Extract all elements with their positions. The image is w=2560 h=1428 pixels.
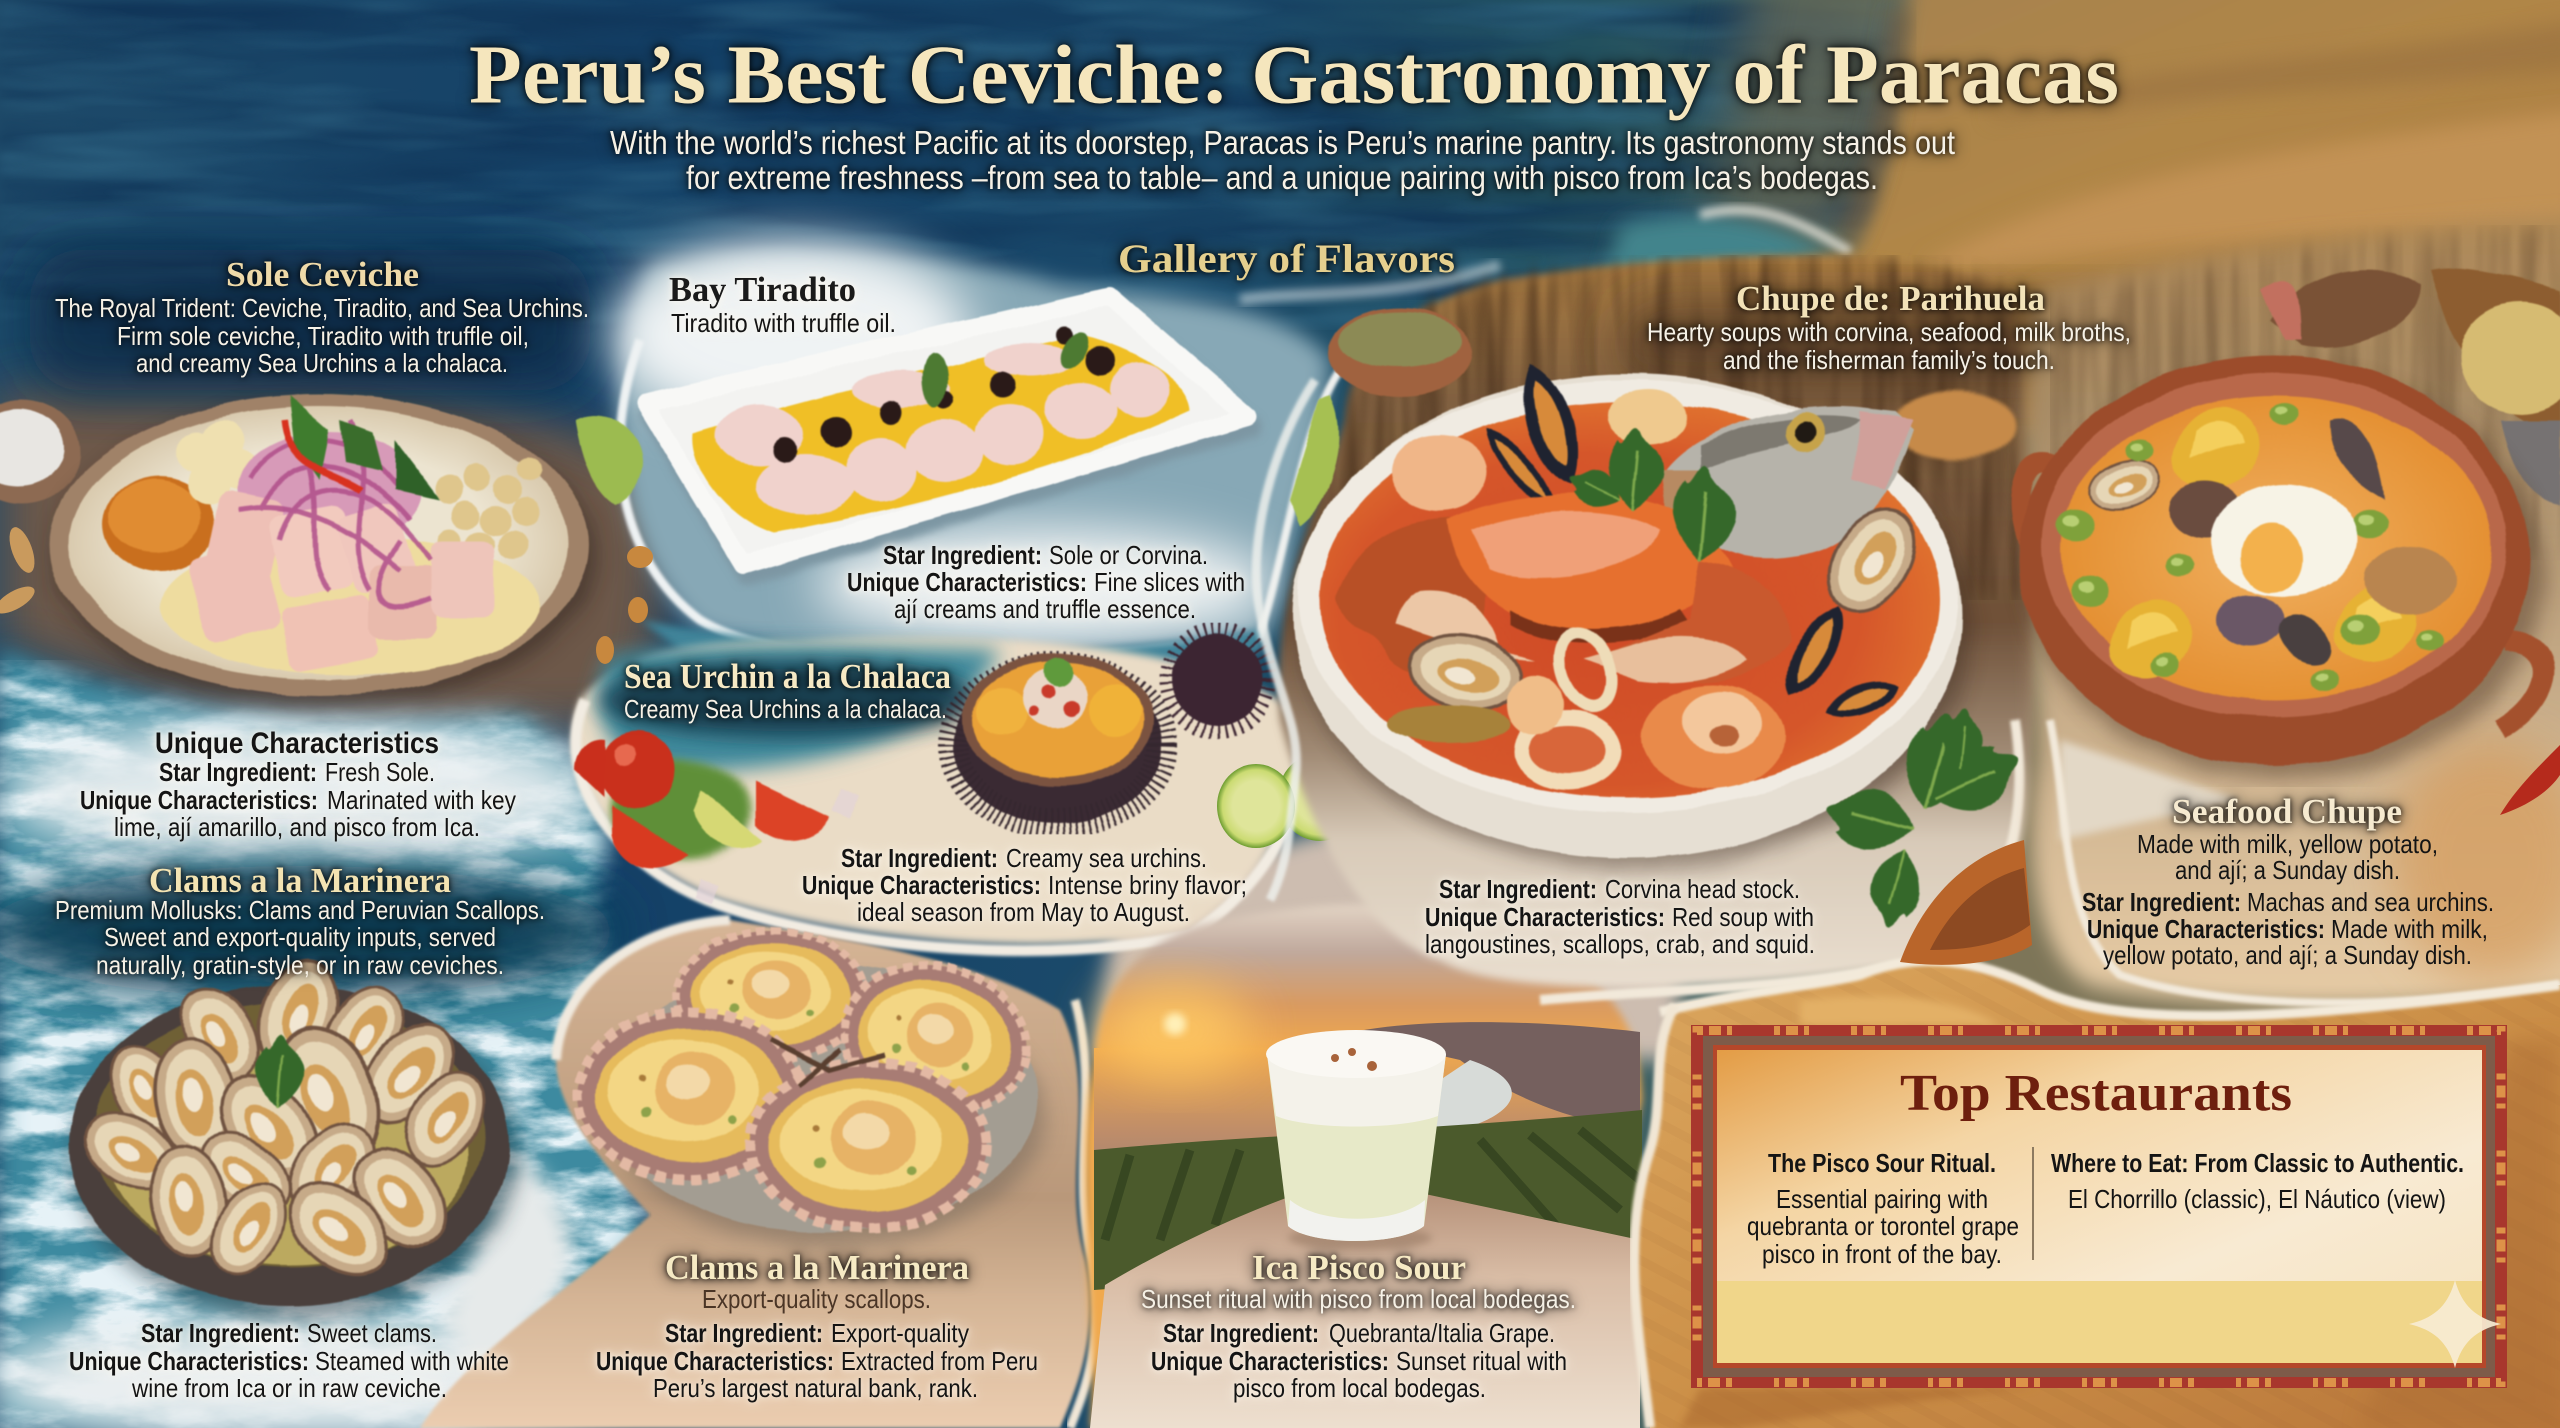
text: chupe details: yellow potato, and ají; a Sunday dish.	[2103, 940, 2472, 970]
title: Peru’s Best Ceviche: Gastronomy of Paracas	[469, 28, 2119, 122]
text: clams a la marinera intro: Sweet and export-quality inputs, served	[104, 922, 496, 952]
text: pisco sour ritual: Essential pairing with	[1776, 1184, 1988, 1214]
text: sea urchin details: Creamy sea urchins.	[1006, 843, 1207, 873]
text: pisco details: Unique Characteristics:	[1151, 1346, 1389, 1376]
text: chupe de parihuela: Chupe de: Parihuela	[1736, 279, 2045, 318]
text: seafood chupe: and ají; a Sunday dish.	[2175, 855, 2400, 885]
icon: pisco sour glass	[1266, 1030, 1446, 1250]
text: tiradito details: Fine slices with	[1094, 567, 1245, 597]
text: clams a la marinera intro: Premium Mollusks: Clams and Peruvian Scallops.	[55, 895, 545, 925]
text: clams details: Steamed with white	[315, 1346, 509, 1376]
text: pisco sour ritual: The Pisco Sour Ritual.	[1768, 1148, 1996, 1178]
text: pisco details: Quebranta/Italia Grape.	[1329, 1318, 1555, 1348]
icon: tiradito plate	[645, 296, 1253, 575]
icon: crab	[1336, 494, 1790, 683]
text: sea urchin details: Star Ingredient:	[841, 843, 998, 873]
icon: ceviche plate	[49, 394, 642, 708]
panel: tiradito	[610, 240, 1340, 676]
text: parihuela details: Star Ingredient:	[1439, 874, 1597, 904]
icon: parsley sprig	[1820, 709, 2031, 932]
card yellow band	[1717, 1281, 2482, 1363]
text: unique characteristics: Marinated with key	[327, 785, 516, 815]
text: unique characteristics: lime, ají amarillo, and pisco from Ica.	[114, 812, 480, 842]
text: pisco sour ritual: pisco in front of the bay.	[1762, 1239, 2002, 1269]
text: chupe details: Unique Characteristics:	[2087, 914, 2325, 944]
text: unique characteristics: Fresh Sole.	[325, 757, 435, 787]
panel: scallops	[420, 920, 1096, 1428]
text: sea urchin details: Unique Characteristics:	[802, 870, 1041, 900]
subtitle: for extreme freshness –from sea to table– and a unique pairing with pisco from Ica’s bodegas.	[686, 159, 1878, 196]
icon: clams and shrimp behind crab	[1391, 389, 1688, 511]
icon: peanuts scattered	[0, 524, 653, 664]
text: unique characteristics	[80, 727, 516, 842]
text: ica pisco sour	[1141, 1248, 1576, 1314]
text: ica pisco sour: Ica Pisco Sour	[1252, 1248, 1466, 1287]
text: where to eat	[2051, 1148, 2464, 1214]
text: sole ceviche: The Royal Trident: Ceviche, Tiradito, and Sea Urchins.	[55, 293, 589, 323]
heading: gallery of flavors: Gallery of Flavors	[1118, 236, 1455, 281]
text: bay tiradito: Bay Tiradito	[669, 270, 856, 309]
ocean behind clams	[0, 650, 650, 1428]
text: unique characteristics: Unique Characteristics	[155, 727, 439, 760]
panel: sole ceviche background	[0, 250, 663, 729]
text: where to eat: Where to Eat: From Classic to Authentic.	[2051, 1148, 2464, 1178]
text: clams details: wine from Ica or in raw ceviche.	[131, 1373, 447, 1403]
text: clams a la marinera intro: Clams a la Marinera	[149, 861, 451, 900]
text: bay tiradito: Tiradito with truffle oil.	[671, 308, 896, 338]
text: clams a la marinera intro	[55, 861, 545, 980]
icon: small terracotta bowl	[1900, 840, 2032, 965]
icon: chupe pot	[2019, 355, 2544, 780]
panel: sea urchin	[573, 637, 1299, 951]
text: clams details: Star Ingredient:	[141, 1318, 300, 1348]
text: tiradito details: Star Ingredient:	[883, 540, 1042, 570]
text: sole ceviche	[55, 255, 589, 378]
text: seafood chupe: Made with milk, yellow potato,	[2137, 829, 2438, 859]
text: pisco details	[1151, 1318, 1567, 1403]
text: pisco details: Star Ingredient:	[1163, 1318, 1319, 1348]
text: chupe details: Machas and sea urchins.	[2247, 887, 2494, 917]
panel: seafood chupe	[2027, 215, 2560, 1004]
text: tiradito details: Sole or Corvina.	[1049, 540, 1208, 570]
text: seafood chupe	[2137, 792, 2438, 885]
ocean wave texture	[0, 0, 1900, 330]
icon: salt bowl	[0, 400, 80, 504]
text: chupe de parihuela: Hearty soups with corvina, seafood, milk broths,	[1647, 317, 2131, 347]
divider	[2032, 1147, 2034, 1260]
text: pisco details: Sunset ritual with	[1396, 1346, 1567, 1376]
card frame	[1691, 1025, 2507, 1388]
icon: parsley on soup	[1563, 428, 1735, 560]
background: desert dunes and cliff	[1240, 0, 2560, 430]
text: chupe details: Made with milk,	[2331, 914, 2488, 944]
text: bay tiradito	[669, 270, 896, 338]
text: parihuela details: Red soup with	[1672, 902, 1814, 932]
text: clams a la marinera intro: naturally, gratin-style, or in raw ceviches.	[96, 950, 504, 980]
text: clams a la marinera scallops: Export-quality scallops.	[702, 1284, 931, 1314]
icon: side bowls and bread	[1290, 308, 2017, 525]
text: parihuela details	[1425, 874, 1815, 959]
text: sea urchin details: Intense briny flavor;	[1048, 870, 1247, 900]
text: parihuela details: langoustines, scallops, crab, and squid.	[1425, 929, 1815, 959]
text: sole ceviche: Sole Ceviche	[226, 255, 419, 294]
text: parihuela details: Corvina head stock.	[1605, 874, 1800, 904]
text: scallops details: Unique Characteristics:	[596, 1346, 834, 1376]
subtitle	[610, 124, 1955, 196]
text: scallops details: Peru’s largest natural bank, rank.	[653, 1373, 978, 1403]
icon: scallops plate	[578, 930, 1045, 1246]
background: light gap between panels	[1090, 830, 1680, 1060]
panel: parihuela	[1256, 255, 2160, 1000]
subtitle: With the world’s richest Pacific at its doorstep, Paracas is Peru’s marine pantry. Its gastronomy stands out	[610, 124, 1955, 161]
text: chupe details	[2082, 887, 2494, 970]
text: sea urchin details: ideal season from May to August.	[857, 897, 1190, 927]
panel: pisco sour scene	[1084, 904, 1642, 1428]
card heading: Top Restaurants	[1900, 1065, 2292, 1122]
text: chupe de parihuela	[1647, 279, 2131, 375]
icon: red chili	[2500, 745, 2560, 815]
icon: lime slices	[1217, 753, 1362, 848]
text: clams details: Sweet clams.	[307, 1318, 437, 1348]
text: clams a la marinera scallops	[665, 1248, 969, 1314]
text: sea urchin details	[802, 843, 1247, 927]
text: pisco details: pisco from local bodegas.	[1233, 1373, 1486, 1403]
text: sea urchin a la chalaca: Creamy Sea Urchins a la chalaca.	[624, 694, 947, 724]
text: tiradito details: Unique Characteristics:	[847, 567, 1087, 597]
text: scallops details	[596, 1318, 1038, 1403]
text: scallops details: Export-quality	[831, 1318, 969, 1348]
text: unique characteristics: Unique Characteristics:	[80, 785, 318, 815]
text: parihuela details: Unique Characteristics:	[1425, 902, 1665, 932]
panel: top restaurants card	[1691, 1025, 2507, 1388]
icon: clams bowl	[68, 948, 517, 1320]
text: seafood chupe: Seafood Chupe	[2172, 792, 2402, 831]
icon: sea urchins	[953, 634, 1264, 823]
text: tiradito details: ají creams and truffle essence.	[894, 594, 1196, 624]
icon: tomatoes and lime	[574, 732, 858, 904]
text: unique characteristics: Star Ingredient:	[159, 757, 317, 787]
panel: restaurants sand	[1634, 961, 2560, 1428]
foam texture	[0, 660, 650, 1428]
text: clams details: Unique Characteristics:	[69, 1346, 309, 1376]
text: scallops details: Extracted from Peru	[841, 1346, 1038, 1376]
text: sea urchin a la chalaca	[624, 657, 951, 724]
text: pisco sour ritual	[1747, 1148, 2019, 1269]
text: pisco sour ritual: quebranta or torontel grape	[1747, 1211, 2019, 1241]
text: sole ceviche: Firm sole ceviche, Tiradito with truffle oil,	[117, 321, 529, 351]
text: clams details	[69, 1318, 509, 1403]
icon: sparkle	[2409, 1280, 2501, 1368]
text: tiradito details	[847, 540, 1245, 624]
card inner surface	[1717, 1050, 2482, 1363]
icon: fish head	[1660, 407, 1915, 558]
icon: mussels in soup	[1476, 359, 1904, 725]
text: chupe de parihuela: and the fisherman family’s touch.	[1723, 345, 2055, 375]
text: ica pisco sour: Sunset ritual with pisco from local bodegas.	[1141, 1284, 1576, 1314]
icon: sweet potato and potato	[2260, 268, 2560, 505]
text: chupe details: Star Ingredient:	[2082, 887, 2241, 917]
icon: clams, squid and shrimp in soup	[1387, 491, 1934, 789]
text: sea urchin a la chalaca: Sea Urchin a la Chalaca	[624, 657, 951, 696]
icon: parihuela bowl	[1292, 359, 1971, 868]
text: clams a la marinera scallops: Clams a la Marinera	[665, 1248, 969, 1287]
text: sole ceviche: and creamy Sea Urchins a la chalaca.	[136, 348, 508, 378]
text: where to eat: El Chorrillo (classic), El Náutico (view)	[2068, 1184, 2446, 1214]
text: scallops details: Star Ingredient:	[665, 1318, 823, 1348]
